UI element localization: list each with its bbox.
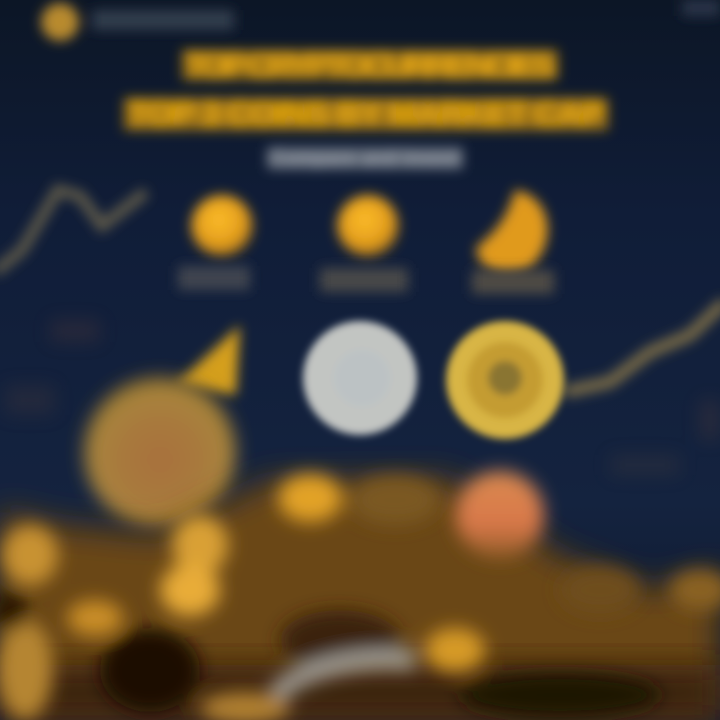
logo	[41, 0, 720, 41]
title: TOP 3 COINS BY MARKET CAP	[128, 95, 604, 133]
subtitle: Compare and invest	[270, 148, 460, 170]
coin heap	[0, 474, 720, 720]
gold coin	[446, 321, 564, 439]
line chart right	[565, 302, 720, 392]
icon: gold moon	[476, 190, 548, 274]
icon: gold coin one	[191, 195, 253, 257]
large coin with gold cone	[84, 325, 240, 528]
icon: gold coin two	[337, 195, 399, 257]
silver coin	[303, 321, 417, 435]
line chart left	[0, 190, 146, 272]
title: TOP CRYPTOCURRENCIES	[185, 47, 555, 85]
icon labels	[178, 266, 554, 294]
orange coin	[456, 471, 544, 559]
faint chart marks	[5, 320, 720, 475]
title	[124, 47, 608, 133]
